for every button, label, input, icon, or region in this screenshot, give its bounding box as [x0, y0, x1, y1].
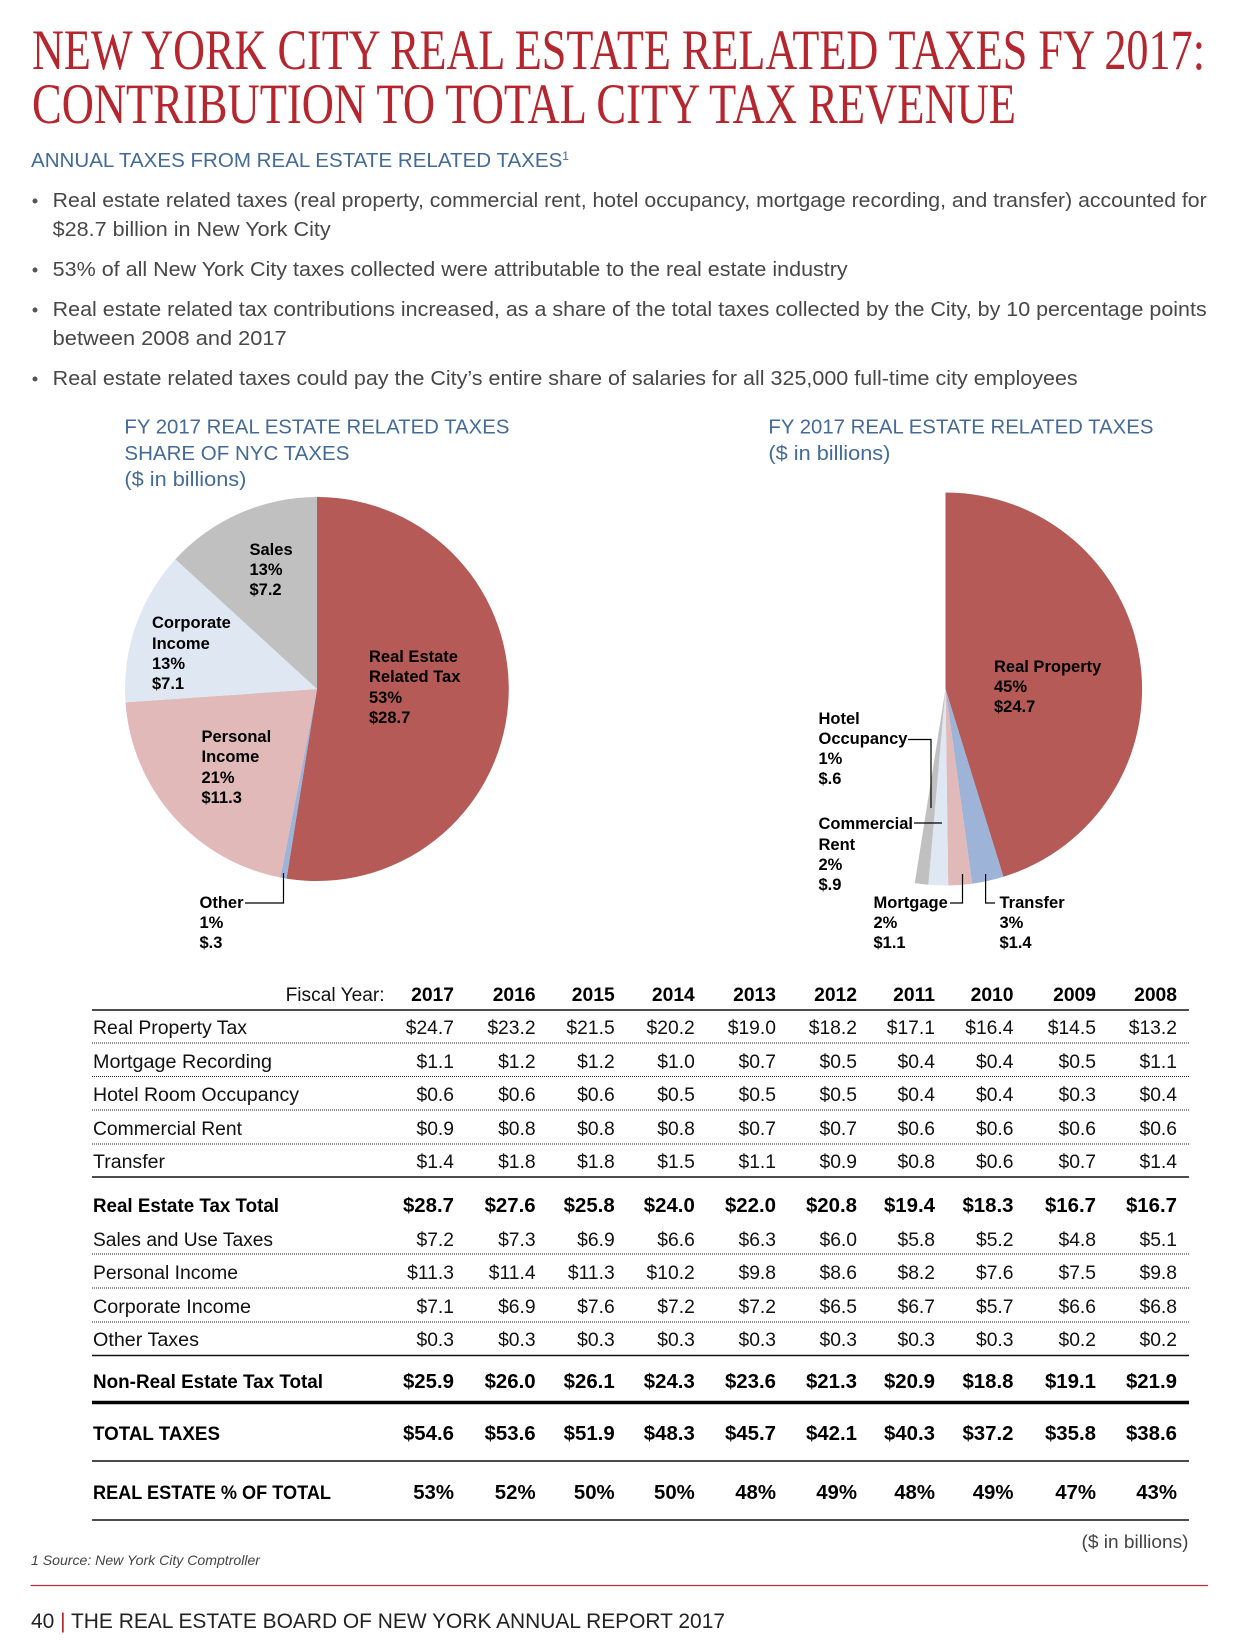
row: real estate percent of total: [93, 1482, 1177, 1504]
right chart heading: FY 2017 REAL ESTATE RELATED TAXES: [768, 416, 1153, 438]
row: other taxes: $0.2: [1058, 1330, 1096, 1351]
row: real estate percent of total: 48%: [894, 1482, 935, 1504]
row: transfer: $1.4: [1139, 1152, 1177, 1173]
row: real estate percent of total: REAL ESTATE % OF TOTAL: [93, 1483, 331, 1504]
row: total taxes: TOTAL TAXES: [93, 1424, 220, 1445]
row: personal income: $7.5: [1058, 1263, 1096, 1284]
row: mortgage recording: $0.4: [976, 1052, 1014, 1073]
row: real estate percent of total: 43%: [1136, 1482, 1177, 1504]
row: transfer: $1.8: [577, 1152, 615, 1173]
source footnote: 1 Source: New York City Comptroller: [31, 1552, 261, 1568]
row: total taxes: $40.3: [884, 1423, 935, 1445]
right chart heading: ($ in billions): [768, 442, 890, 465]
row: transfer: $1.5: [657, 1152, 695, 1173]
row: other taxes: [93, 1330, 1177, 1351]
row: hotel room occupancy: $0.4: [1139, 1085, 1177, 1106]
row: corporate income: $6.5: [819, 1297, 857, 1318]
row: real property tax: $23.2: [487, 1018, 536, 1039]
row: real estate percent of total: 53%: [413, 1482, 454, 1504]
row: real property tax: Real Property Tax: [93, 1018, 248, 1039]
label: real estate related tax: [369, 648, 461, 727]
row: mortgage recording: $1.0: [657, 1052, 695, 1073]
row: other taxes: $0.3: [498, 1330, 536, 1351]
row: real estate tax total: $20.8: [806, 1195, 857, 1217]
row: corporate income: [93, 1297, 1177, 1318]
row: corporate income: $7.2: [738, 1297, 776, 1318]
row: commercial rent: $0.6: [897, 1119, 935, 1140]
label: commercial rent: Commercial: [818, 815, 913, 833]
label: commercial rent: 2%: [818, 856, 843, 874]
label: real estate related tax: 53%: [369, 689, 402, 707]
row: commercial rent: $0.7: [738, 1119, 776, 1140]
row: mortgage recording: $0.5: [1058, 1052, 1096, 1073]
row: commercial rent: $0.8: [577, 1119, 615, 1140]
left chart heading: ($ in billions): [124, 468, 246, 491]
left chart heading: FY 2017 REAL ESTATE RELATED TAXES: [124, 416, 509, 438]
table header: 2009: [1053, 985, 1096, 1006]
row: non-real estate tax total: $25.9: [403, 1371, 454, 1393]
row: real estate percent of total: 47%: [1055, 1482, 1096, 1504]
table header: [286, 985, 1177, 1006]
page footer: 40 | THE REAL ESTATE BOARD OF NEW YORK ANNUAL REPORT 2017: [31, 1610, 725, 1633]
row: transfer: $0.9: [819, 1152, 857, 1173]
row: sales and use taxes: $7.3: [498, 1230, 536, 1251]
row: other taxes: $0.3: [738, 1330, 776, 1351]
row: real property tax: $19.0: [728, 1018, 776, 1039]
row: real property tax: [93, 1018, 1177, 1039]
row: non-real estate tax total: $20.9: [884, 1371, 935, 1393]
label: sales: 13%: [250, 561, 283, 579]
row: mortgage recording: $0.4: [897, 1052, 935, 1073]
row: mortgage recording: $1.1: [416, 1052, 454, 1073]
row: commercial rent: Commercial Rent: [93, 1119, 243, 1140]
row: other taxes: $0.3: [976, 1330, 1014, 1351]
label: other: Other: [200, 894, 244, 912]
row: real property tax: $21.5: [566, 1018, 615, 1039]
row: transfer: $1.8: [498, 1152, 536, 1173]
row: non-real estate tax total: $18.8: [962, 1371, 1014, 1393]
row: corporate income: $6.8: [1139, 1297, 1177, 1318]
label: mortgage: [874, 874, 962, 952]
title: [32, 19, 1205, 136]
table header: 2014: [652, 985, 695, 1006]
label: real property: 45%: [994, 678, 1027, 696]
row: real estate tax total: [93, 1195, 1177, 1217]
row: hotel room occupancy: $0.5: [738, 1085, 776, 1106]
pie chart: real estate related taxes: [818, 492, 1142, 952]
row: total taxes: $42.1: [806, 1423, 857, 1445]
left chart heading: SHARE OF NYC TAXES: [124, 442, 349, 465]
label: mortgage: 2%: [874, 914, 898, 932]
label: corporate income: $7.1: [152, 675, 184, 693]
label: transfer: $1.4: [1000, 934, 1032, 952]
bullet list: Real estate related taxes could pay the City’s entire share of salaries for all 325,000 full-time city employees: [53, 367, 1078, 390]
label: other: [200, 873, 284, 952]
label: hotel occupancy: Hotel: [818, 710, 860, 728]
row: corporate income: $7.1: [416, 1297, 454, 1318]
row: sales and use taxes: $5.1: [1139, 1230, 1177, 1251]
row: real estate tax total: $28.7: [403, 1195, 454, 1217]
label: corporate income: Income: [152, 635, 210, 653]
bullet list: Real estate related tax contributions increased, as a share of the total taxes collected by the City, by 10 percentage points: [53, 298, 1207, 321]
row: personal income: $7.6: [976, 1263, 1014, 1284]
row: real estate percent of total: 48%: [735, 1482, 776, 1504]
label: sales: [250, 541, 293, 599]
row: sales and use taxes: $5.8: [897, 1230, 935, 1251]
bullet list: between 2008 and 2017: [53, 327, 287, 350]
row: other taxes: $0.3: [657, 1330, 695, 1351]
row: personal income: Personal Income: [93, 1263, 238, 1284]
table header: 2016: [493, 985, 536, 1006]
row: real estate tax total: $27.6: [485, 1195, 536, 1217]
row: total taxes: $53.6: [485, 1423, 536, 1445]
row: hotel room occupancy: $0.3: [1058, 1085, 1096, 1106]
label: transfer: [986, 874, 1065, 952]
row: real estate tax total: $24.0: [644, 1195, 695, 1217]
row: personal income: [93, 1263, 1177, 1284]
row: commercial rent: $0.7: [819, 1119, 857, 1140]
label: hotel occupancy: $.6: [818, 770, 841, 788]
row: real estate tax total: $16.7: [1126, 1195, 1177, 1217]
row: other taxes: $0.3: [819, 1330, 857, 1351]
row: total taxes: $51.9: [564, 1423, 615, 1445]
label: hotel occupancy: 1%: [818, 750, 843, 768]
row: real estate percent of total: 52%: [495, 1482, 536, 1504]
row: real property tax: $24.7: [406, 1018, 454, 1039]
row: total taxes: $38.6: [1126, 1423, 1177, 1445]
row: commercial rent: $0.8: [498, 1119, 536, 1140]
row: corporate income: $7.2: [657, 1297, 695, 1318]
table header: 2010: [971, 985, 1014, 1006]
table header: 2013: [733, 985, 776, 1006]
row: corporate income: Corporate Income: [93, 1297, 251, 1318]
row: non-real estate tax total: $24.3: [644, 1371, 695, 1393]
row: commercial rent: $0.6: [1058, 1119, 1096, 1140]
row: mortgage recording: $0.7: [738, 1052, 776, 1073]
row: mortgage recording: [93, 1052, 1177, 1073]
row: transfer: $0.8: [897, 1152, 935, 1173]
row: corporate income: $6.6: [1058, 1297, 1096, 1318]
label: mortgage: Mortgage: [874, 894, 948, 912]
row: real property tax: $17.1: [887, 1018, 935, 1039]
label: corporate income: Corporate: [152, 614, 231, 632]
row: real property tax: $16.4: [965, 1018, 1014, 1039]
row: real estate tax total: Real Estate Tax Total: [93, 1196, 279, 1217]
row: mortgage recording: Mortgage Recording: [93, 1052, 272, 1073]
row: personal income: $11.4: [489, 1263, 536, 1284]
section heading: ANNUAL TAXES FROM REAL ESTATE RELATED TAXES: [31, 149, 561, 172]
label: real property: [994, 658, 1102, 716]
row: corporate income: $6.7: [897, 1297, 935, 1318]
bullet list: Real estate related taxes (real property, commercial rent, hotel occupancy, mortgage recording, and transfer) accounted for: [53, 189, 1207, 212]
row: non-real estate tax total: $21.3: [806, 1371, 857, 1393]
label: real estate related tax: Related Tax: [369, 668, 461, 686]
row: real estate percent of total: 49%: [816, 1482, 857, 1504]
row: sales and use taxes: $7.2: [416, 1230, 454, 1251]
row: transfer: $0.7: [1058, 1152, 1096, 1173]
row: real estate tax total: $19.4: [884, 1195, 936, 1217]
row: real estate percent of total: 49%: [973, 1482, 1014, 1504]
bullet list: $28.7 billion in New York City: [53, 218, 331, 241]
row: hotel room occupancy: $0.6: [498, 1085, 536, 1106]
right chart heading: [768, 416, 1153, 465]
label: personal income: [202, 728, 271, 807]
row: sales and use taxes: $6.9: [577, 1230, 615, 1251]
label: real property: Real Property: [994, 658, 1102, 676]
label: real estate related tax: $28.7: [369, 709, 410, 727]
row: real estate tax total: $22.0: [725, 1195, 776, 1217]
row: hotel room occupancy: $0.4: [897, 1085, 935, 1106]
row: real estate percent of total: 50%: [654, 1482, 695, 1504]
row: hotel room occupancy: [93, 1085, 1177, 1106]
row: non-real estate tax total: $19.1: [1045, 1371, 1096, 1393]
row: mortgage recording: $1.1: [1139, 1052, 1177, 1073]
row: commercial rent: $0.8: [657, 1119, 695, 1140]
row: real estate percent of total: 50%: [574, 1482, 615, 1504]
row: sales and use taxes: [93, 1230, 1177, 1251]
row: real estate tax total: $16.7: [1045, 1195, 1096, 1217]
row: non-real estate tax total: $26.0: [485, 1371, 536, 1393]
row: total taxes: $35.8: [1045, 1423, 1096, 1445]
row: real property tax: $20.2: [647, 1018, 695, 1039]
label: commercial rent: $.9: [818, 876, 841, 894]
label: transfer: 3%: [1000, 914, 1024, 932]
label: personal income: Income: [202, 748, 259, 766]
label: commercial rent: [818, 815, 942, 894]
label: commercial rent: Rent: [818, 836, 856, 854]
bullet list: 53% of all New York City taxes collected were attributable to the real estate industry: [53, 258, 848, 281]
label: other: 1%: [200, 914, 224, 932]
row: commercial rent: $0.6: [1139, 1119, 1177, 1140]
left chart heading: [124, 416, 509, 491]
table header: 2011: [893, 985, 935, 1006]
row: sales and use taxes: $6.0: [819, 1230, 857, 1251]
row: transfer: $1.1: [738, 1152, 776, 1173]
row: hotel room occupancy: $0.6: [577, 1085, 615, 1106]
row: personal income: $9.8: [1139, 1263, 1177, 1284]
label: sales: $7.2: [250, 581, 282, 599]
table header: 2017: [411, 985, 454, 1006]
table header: 2008: [1134, 985, 1177, 1006]
row: other taxes: $0.3: [416, 1330, 454, 1351]
row: other taxes: Other Taxes: [93, 1330, 199, 1351]
label: corporate income: [152, 614, 231, 693]
row: personal income: $8.6: [819, 1263, 857, 1284]
row: total taxes: $48.3: [644, 1423, 695, 1445]
row: non-real estate tax total: $26.1: [564, 1371, 615, 1393]
row: sales and use taxes: $6.6: [657, 1230, 695, 1251]
row: transfer: [93, 1152, 1177, 1173]
row: real property tax: $18.2: [809, 1018, 857, 1039]
row: hotel room occupancy: $0.5: [657, 1085, 695, 1106]
row: real property tax: $14.5: [1048, 1018, 1096, 1039]
table header: Fiscal Year:: [286, 985, 385, 1006]
label: personal income: $11.3: [202, 789, 242, 807]
row: commercial rent: $0.9: [416, 1119, 454, 1140]
row: mortgage recording: $1.2: [577, 1052, 615, 1073]
table header: 2015: [572, 985, 615, 1006]
row: hotel room occupancy: $0.4: [976, 1085, 1014, 1106]
table header: 2012: [814, 985, 857, 1006]
row: other taxes: $0.2: [1139, 1330, 1177, 1351]
row: hotel room occupancy: Hotel Room Occupancy: [93, 1085, 299, 1106]
row: personal income: $10.2: [647, 1263, 695, 1284]
row: corporate income: $6.9: [498, 1297, 536, 1318]
row: non-real estate tax total: Non-Real Estate Tax Total: [93, 1372, 323, 1393]
row: real property tax: $13.2: [1129, 1018, 1177, 1039]
row: sales and use taxes: Sales and Use Taxes: [93, 1230, 273, 1251]
label: corporate income: 13%: [152, 655, 185, 673]
row: personal income: $9.8: [738, 1263, 776, 1284]
label: personal income: Personal: [202, 728, 271, 746]
label: real estate related tax: Real Estate: [369, 648, 458, 666]
label: hotel occupancy: Occupancy: [818, 730, 908, 748]
row: non-real estate tax total: $21.9: [1126, 1371, 1177, 1393]
row: personal income: $11.3: [568, 1263, 615, 1284]
table: [92, 985, 1189, 1520]
row: non-real estate tax total: $23.6: [725, 1371, 776, 1393]
row: corporate income: $7.6: [577, 1297, 615, 1318]
row: other taxes: $0.3: [577, 1330, 615, 1351]
label: personal income: 21%: [202, 769, 235, 787]
units note: ($ in billions): [1082, 1531, 1188, 1552]
label: hotel occupancy: [818, 710, 931, 808]
row: sales and use taxes: $5.2: [976, 1230, 1014, 1251]
row: personal income: $11.3: [407, 1263, 454, 1284]
row: commercial rent: $0.6: [976, 1119, 1014, 1140]
row: commercial rent: [93, 1119, 1177, 1140]
row: non-real estate tax total: [93, 1371, 1177, 1393]
row: corporate income: $5.7: [976, 1297, 1014, 1318]
row: real estate tax total: $18.3: [962, 1195, 1014, 1217]
row: total taxes: $37.2: [962, 1423, 1014, 1445]
label: transfer: Transfer: [1000, 894, 1065, 912]
label: other: $.3: [200, 934, 222, 952]
label: sales: Sales: [250, 541, 293, 559]
row: transfer: Transfer: [93, 1152, 166, 1173]
bullet list: [32, 189, 1207, 390]
row: total taxes: $45.7: [725, 1423, 776, 1445]
row: mortgage recording: $1.2: [498, 1052, 536, 1073]
row: hotel room occupancy: $0.5: [819, 1085, 857, 1106]
row: total taxes: [93, 1423, 1177, 1445]
row: sales and use taxes: $4.8: [1058, 1230, 1096, 1251]
row: hotel room occupancy: $0.6: [416, 1085, 454, 1106]
section heading: 1: [562, 149, 569, 163]
label: mortgage: $1.1: [874, 934, 906, 952]
label: real property: $24.7: [994, 698, 1035, 716]
row: total taxes: $54.6: [403, 1423, 454, 1445]
row: transfer: $0.6: [976, 1152, 1014, 1173]
row: other taxes: $0.3: [897, 1330, 935, 1351]
row: mortgage recording: $0.5: [819, 1052, 857, 1073]
row: sales and use taxes: $6.3: [738, 1230, 776, 1251]
row: transfer: $1.4: [416, 1152, 454, 1173]
pie chart: share of NYC taxes: [125, 497, 509, 952]
row: real estate tax total: $25.8: [564, 1195, 615, 1217]
row: personal income: $8.2: [897, 1263, 935, 1284]
